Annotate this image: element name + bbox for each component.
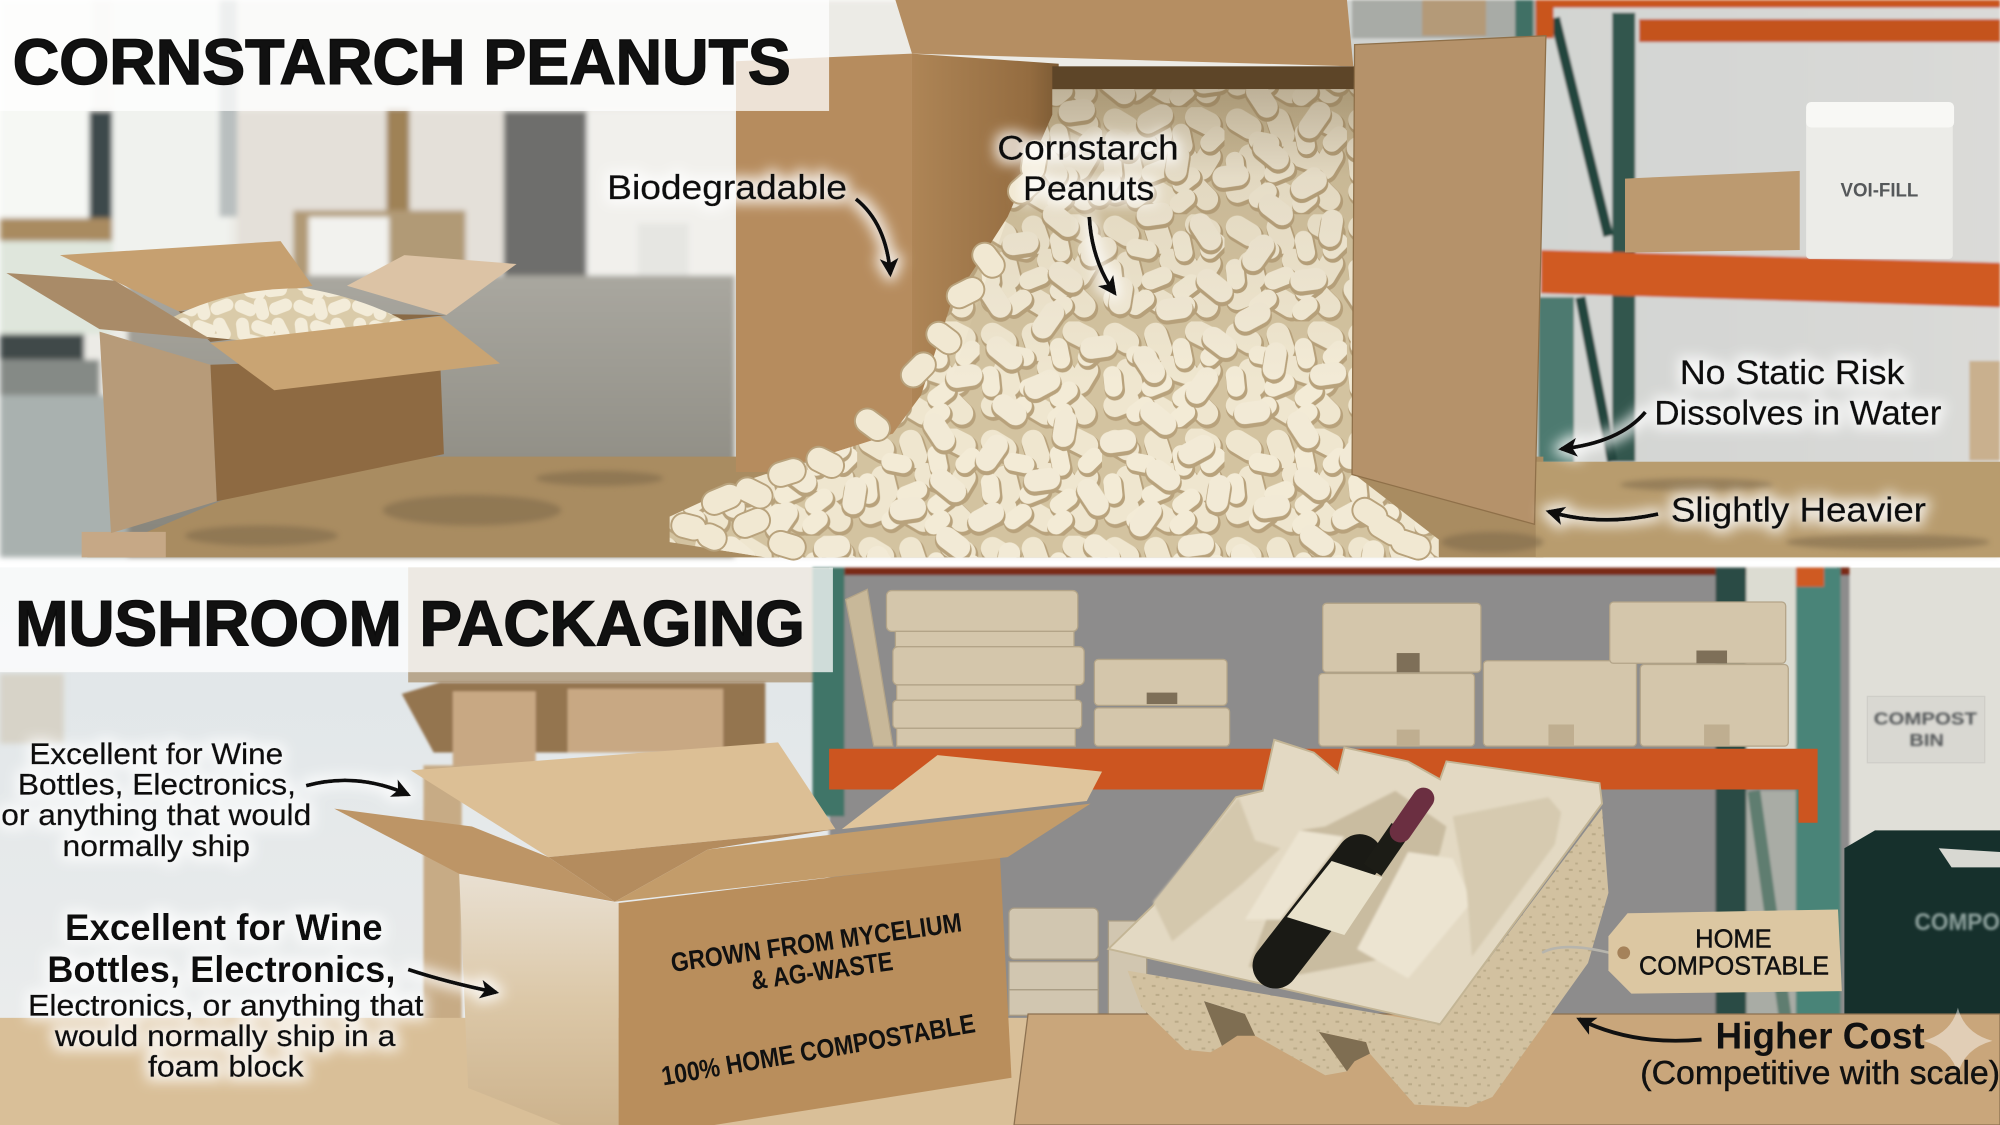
tray top rim: [1108, 740, 1602, 1024]
main shipping box: [334, 742, 1102, 1125]
block notches: [1147, 651, 1730, 746]
home compostable hang tag: [1542, 909, 1842, 994]
molded mushroom tray: [1108, 740, 1608, 1107]
callout: excellent for wine, large block: Electronics, or anything that: [28, 989, 423, 1022]
right wooden table: [1536, 462, 2000, 557]
title: cornstarch peanuts: CORNSTARCH PEANUTS: [13, 26, 791, 98]
shelf box: [1625, 171, 1800, 253]
callout: excellent for wine, small block: or anything that would: [1, 799, 311, 832]
compost bin sign: COMPOST: [1874, 708, 1977, 728]
compost bin sign: BIN: [1909, 730, 1944, 750]
callout: cornstarch peanuts: Cornstarch: [997, 129, 1179, 167]
callout: no static risk, dissolves in water: [1561, 354, 1941, 449]
callout: excellent for wine, large block: Bottles, Electronics,: [47, 949, 395, 990]
title: mushroom packaging: [0, 568, 833, 672]
callout: excellent for wine, small block: normally ship: [62, 830, 250, 863]
callout: no static risk, dissolves in water: Dissolves in Water: [1654, 395, 1941, 433]
callout: excellent for wine, small block: Bottles, Electronics,: [18, 769, 296, 802]
tray leg shadows: [1204, 1001, 1370, 1071]
left wooden table: [87, 457, 1543, 557]
callout: excellent for wine, small block: [1, 738, 408, 863]
panel: mushroom packaging: [0, 568, 2000, 1125]
callout: slightly heavier: [1548, 492, 1926, 530]
stacks of mycelium blocks on shelf: [846, 589, 1788, 746]
large open cardboard box: [736, 0, 1355, 472]
callout: biodegradable: [607, 169, 890, 274]
right box flap: [1352, 36, 1546, 524]
warehouse background with window, door and floor: [0, 0, 2000, 557]
callout: biodegradable: Biodegradable: [607, 169, 847, 207]
callout: excellent for wine, small block: Excellent for Wine: [29, 738, 283, 771]
tray valleys and ribs: [1153, 791, 1561, 978]
compost bin sign: [1867, 696, 1985, 763]
box print: home compostable: 100% HOME COMPOSTABLE: [659, 1008, 977, 1091]
callout: cornstarch peanuts: Peanuts: [1023, 170, 1154, 208]
lower shelf blocks: [1009, 908, 1147, 1015]
title: mushroom packaging: MUSHROOM PACKAGING: [15, 587, 805, 659]
callout: higher cost: Higher Cost: [1716, 1015, 1925, 1056]
callout: excellent for wine, large block: would normally ship in a: [54, 1020, 396, 1053]
grey back wall and shelving: [812, 568, 1849, 1027]
small peanut heap: [170, 288, 415, 341]
title: cornstarch peanuts: [0, 0, 829, 111]
cornstarch peanut pile: [670, 89, 1439, 557]
callout: no static risk, dissolves in water: No Static Risk: [1680, 354, 1905, 392]
callout: higher cost: [1579, 1015, 2000, 1092]
callout: slightly heavier: Slightly Heavier: [1671, 492, 1926, 530]
white VOI-FILL bucket: VOI-FILL: [1841, 180, 1919, 201]
callout: cornstarch peanuts: [997, 129, 1179, 293]
home compostable hang tag: COMPOSTABLE: [1639, 952, 1829, 980]
home compostable hang tag: HOME: [1695, 926, 1772, 954]
sparkle mark: [1923, 1008, 1992, 1074]
upper beige background: [408, 568, 829, 682]
green compost bin: [1844, 830, 2000, 1020]
right shelving background: [1339, 0, 2000, 466]
left wall: [0, 568, 829, 1027]
box print: ag-waste: & AG-WASTE: [749, 946, 895, 996]
right wall: [1837, 568, 2000, 1027]
orange shelf beam: [829, 749, 1818, 823]
wine bottle: [1276, 798, 1423, 966]
small open box with peanuts: [6, 241, 517, 557]
callout: excellent for wine, large block: foam block: [148, 1051, 304, 1084]
left tabletop: [0, 1018, 1033, 1125]
table wear marks: [185, 471, 1990, 552]
panel: cornstarch peanuts: [0, 0, 2000, 557]
box print: grown from mycelium: GROWN FROM MYCELIUM: [669, 907, 964, 978]
white VOI-FILL bucket: [1806, 102, 1954, 259]
callout: excellent for wine, large block: Excellent for Wine: [65, 907, 383, 948]
window frame hint: [0, 673, 64, 744]
background cardboard boxes: [402, 682, 765, 1020]
callout: higher cost: (Competitive with scale): [1640, 1055, 2000, 1092]
tray rough base with legs: [1128, 809, 1608, 1107]
callout: excellent for wine, large block: [28, 907, 496, 1084]
right tabletop: [1014, 1014, 2000, 1125]
